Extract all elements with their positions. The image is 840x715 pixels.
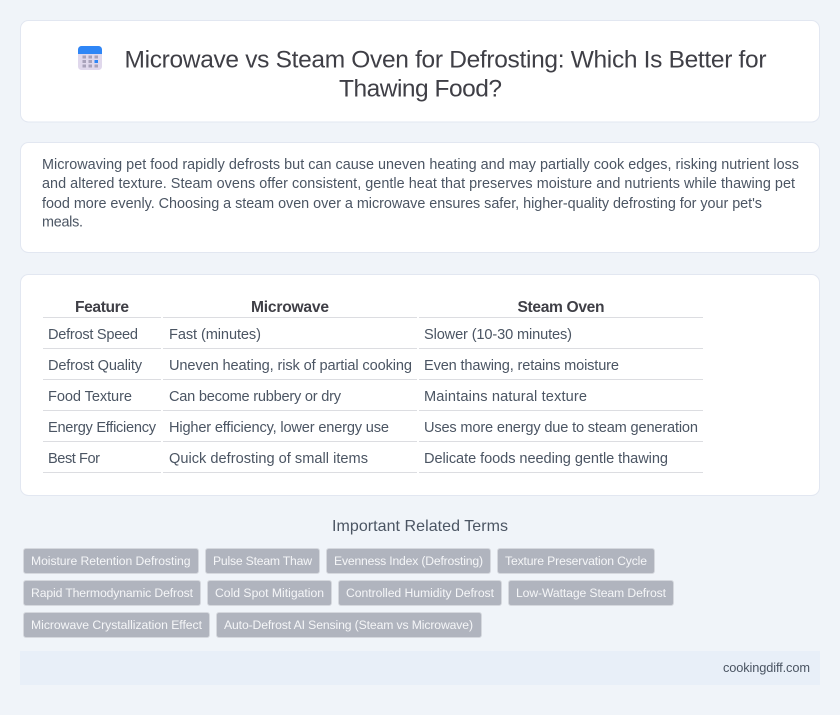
tag [508, 580, 674, 606]
icon: calendar [78, 46, 102, 70]
panel: comparison table [20, 274, 820, 496]
table row: defrost speed: Slower (10-30 minutes) [424, 327, 572, 343]
table row: defrost quality: Even thawing, retains moisture [424, 358, 619, 374]
tag [326, 548, 490, 574]
table row: best for: Quick defrosting of small items [169, 451, 368, 467]
tag [206, 548, 320, 574]
table header: Steam Oven [518, 299, 604, 316]
table row: defrost speed [43, 327, 703, 348]
table header [43, 299, 703, 318]
tag: Microwave Crystallization Effect [31, 618, 203, 632]
table row: food texture: Can become rubbery or dry [169, 389, 342, 405]
tag group: related terms [24, 548, 674, 638]
table row: defrost speed: Defrost Speed [48, 327, 138, 343]
table row: food texture [43, 389, 703, 410]
tag: Evenness Index (Defrosting) [334, 554, 483, 568]
text block: introduction paragraph: food more evenly. Choosing a steam oven over a microwave ensures safer, higher-quality defrosting for your pet's [42, 196, 762, 212]
tag [498, 548, 654, 574]
footer source text: cookingdiff.com [723, 660, 810, 675]
text block: introduction paragraph: meals. [42, 214, 83, 230]
table row: energy efficiency: Uses more energy due to steam generation [424, 420, 698, 436]
tag [216, 612, 482, 638]
table row: best for: Delicate foods needing gentle thawing [424, 451, 668, 467]
heading: title: Thawing Food? [339, 76, 502, 102]
heading: important related terms: Important Related Terms [332, 518, 508, 535]
table row: defrost quality [43, 358, 703, 380]
tag: Auto-Defrost AI Sensing (Steam vs Microwave) [224, 618, 473, 632]
table row: energy efficiency [43, 420, 703, 442]
tag: Moisture Retention Defrosting [31, 554, 190, 568]
tag: Controlled Humidity Defrost [346, 586, 495, 600]
tag [24, 612, 210, 638]
panel: introduction [20, 142, 820, 252]
heading: title: Microwave vs Steam Oven for Defrosting: Which Is Better for [124, 46, 766, 74]
table row: defrost speed: Fast (minutes) [169, 327, 261, 343]
table row: energy efficiency: Energy Efficiency [48, 420, 157, 436]
tag: Cold Spot Mitigation [215, 586, 324, 600]
table row: best for [43, 451, 703, 472]
table header: Microwave [251, 299, 329, 316]
tag [338, 580, 502, 606]
tag: Texture Preservation Cycle [505, 554, 647, 568]
tag: Low-Wattage Steam Defrost [516, 586, 667, 600]
table header: Feature [75, 299, 129, 316]
tag [24, 548, 198, 574]
text block: introduction paragraph: Microwaving pet food rapidly defrosts but can cause uneven heating and may partially cook edges, risking nutrient loss [42, 157, 799, 173]
table row: best for: Best For [48, 451, 100, 467]
text block: introduction paragraph: and altered texture. Steam ovens offer consistent, gentle heat that preserves moisture and nutrients while thawing pet [42, 176, 795, 192]
tag [24, 580, 200, 606]
table row: food texture: Maintains natural texture [424, 389, 587, 405]
table row: defrost quality: Defrost Quality [48, 358, 143, 374]
tag [208, 580, 332, 606]
table row: food texture: Food Texture [48, 389, 132, 405]
table row: defrost quality: Uneven heating, risk of partial cooking [169, 358, 412, 374]
footer [20, 651, 820, 685]
tag: Pulse Steam Thaw [213, 554, 312, 568]
tag: Rapid Thermodynamic Defrost [31, 586, 194, 600]
panel: title header [20, 20, 820, 122]
table row: energy efficiency: Higher efficiency, lower energy use [169, 420, 389, 436]
